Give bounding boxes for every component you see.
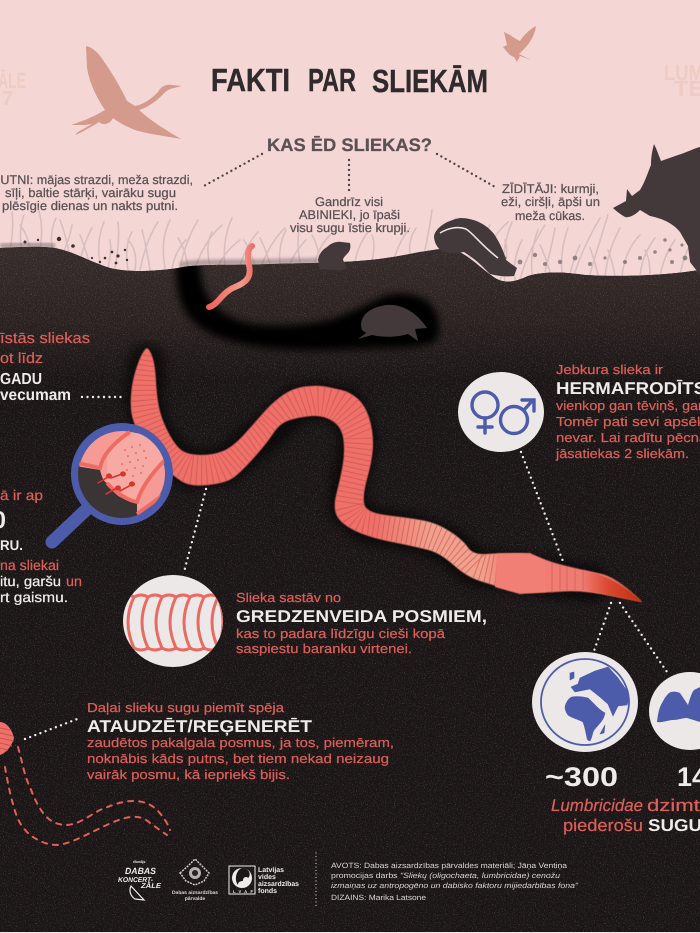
tail segments xyxy=(552,563,583,593)
text block: amphibians: visu sugu īstie krupji. xyxy=(290,221,410,235)
icon: globe xyxy=(532,652,638,752)
numbers: species counts xyxy=(545,762,700,792)
dashed regrowth outline xyxy=(5,747,170,845)
title: SLIEKĀM xyxy=(372,63,488,99)
logo: Dabas aizsardzības pārvalde xyxy=(172,859,218,902)
logo: Dabas aizsardzības pārvalde: Dabas aizsardzības xyxy=(172,890,218,896)
text block: sources: promocijas darbs "Sliekų (oligochaeta, lumbricidae) cenožu xyxy=(331,871,561,880)
numbers: species counts: ~300 xyxy=(545,762,618,792)
text block: mammals: ZĪDĪTĀJI: kurmji, xyxy=(502,182,599,196)
text block: hermaphrodite: Jebkura slieka ir xyxy=(556,362,664,377)
dotted connector: age xyxy=(82,396,126,398)
dotted connectors: species xyxy=(594,603,667,672)
text block: sensing: RU. xyxy=(0,537,23,553)
text block: ring segments: Slieka sastāv no xyxy=(236,590,341,605)
text block: species: SUGU xyxy=(648,816,700,835)
logo: Dabas koncertzāle: DABAS xyxy=(125,866,156,876)
text block: regeneration xyxy=(87,700,394,782)
text block: hermaphrodite: vienkop gan tēviņš, gan xyxy=(556,398,700,413)
text block: ring segments xyxy=(236,590,487,656)
worm shadow xyxy=(144,362,590,583)
text block: regeneration: noknābis kāds putns, bet tiem nekad neizaug xyxy=(87,751,389,766)
text block: age: GADU xyxy=(0,371,42,388)
text block: amphibians xyxy=(290,195,410,235)
dotted connector: hermaphrodite xyxy=(521,452,564,564)
dotted connector: regeneration xyxy=(25,718,80,739)
icon: badger xyxy=(434,218,517,276)
logo: Latvijas vides aizsardzības fonds: LVAF xyxy=(233,889,254,894)
text block: mammals xyxy=(501,182,600,223)
icon: frog xyxy=(318,242,350,270)
text block: sensing: na sliekai xyxy=(0,557,59,573)
text block: hermaphrodite: jāsatiekas 2 sliekām. xyxy=(555,446,689,461)
text block: sensing: itu, garšu xyxy=(0,573,61,589)
icon: Latvia map xyxy=(649,672,700,750)
text block: regeneration: ATAUDZĒT/REĢENERĒT xyxy=(87,717,313,736)
text block: ring segments: saspiestu baranku virtenei. xyxy=(236,641,412,656)
text block: hermaphrodite: HERMAFRODĪTS xyxy=(556,379,700,398)
bottom edge line xyxy=(0,932,700,933)
text block: age: ot līdz xyxy=(0,350,43,367)
text block: regeneration: zaudētos pakaļgala posmus, ja tos, piemēram, xyxy=(87,735,394,750)
icon: gender symbols xyxy=(458,372,544,452)
text block: regeneration: vairāk posmu, kā iepriekš bijis. xyxy=(87,767,290,782)
text block: mammals: meža cūkas. xyxy=(515,209,585,223)
text block: birds: sīļi, baltie stārķi, vairāku sugu xyxy=(5,186,176,200)
logo: Dabas koncertzāle: ZĀLE xyxy=(140,882,161,890)
dotted connector: segments xyxy=(184,489,206,572)
text block: sources: AVOTS: Dabas aizsardzības pārvaldes materiāli; Jāņa Ventiņa xyxy=(331,861,568,870)
magnifying glass xyxy=(52,427,175,542)
worm segments xyxy=(144,355,497,573)
title xyxy=(211,62,488,99)
text block: sensing: un xyxy=(66,573,82,589)
faded logo text left xyxy=(0,68,26,110)
icon: boar xyxy=(613,144,700,275)
text block: age: īstās sliekas xyxy=(0,330,90,347)
text block: age xyxy=(0,330,90,404)
burrow tunnel xyxy=(176,262,439,350)
icon: flying stork xyxy=(71,46,182,139)
heading: who eats earthworms: KAS ĒD SLIEKAS? xyxy=(267,135,432,155)
faded logo text left: 7 xyxy=(2,88,13,110)
text block: sources: DIZAINS: Marika Latsone xyxy=(331,893,426,902)
text block: species: piederošu xyxy=(563,816,643,835)
text block: ring segments: kas to padara līdzīgu cieši kopā xyxy=(236,626,446,641)
logo: Latvijas vides aizsardzības fonds: aizsardzības xyxy=(258,880,299,888)
text block: ring segments: GREDZENVEIDA POSMIEM, xyxy=(236,607,487,626)
logo: Dabas aizsardzības pārvalde: pārvalde xyxy=(185,896,205,902)
logo: Dabas koncertzāle: KONCERT- xyxy=(118,877,154,884)
text block: sources: izmaiņas uz antropogēno un dabisko faktoru mijiedarbības fona" xyxy=(331,881,578,890)
lens xyxy=(75,427,169,521)
logo: Dabas koncertzāle xyxy=(118,860,161,900)
text block: sensing xyxy=(0,487,82,605)
dotted connectors from heading xyxy=(202,154,497,192)
soil crumbs above the ground xyxy=(0,237,318,265)
text block: regeneration: Daļai slieku sugu piemīt spēja xyxy=(87,700,285,715)
text block: age: vecumam xyxy=(0,387,71,404)
worm xyxy=(131,348,642,602)
logo: Latvijas vides aizsardzības fonds xyxy=(229,866,299,895)
text block: amphibians: Gandrīz visi xyxy=(315,195,383,209)
text block: sensing: rt gaismu. xyxy=(0,589,68,605)
logo: Latvijas vides aizsardzības fonds: vides xyxy=(258,873,276,881)
dotted divider xyxy=(315,853,317,906)
grass xyxy=(10,208,692,282)
text block: species: dzimtai xyxy=(647,796,700,815)
text block: hermaphrodite: Tomēr pati sevi apsēklot xyxy=(556,414,700,429)
worm tail xyxy=(583,570,642,602)
logo: Latvijas vides aizsardzības fonds: fonds xyxy=(258,887,277,895)
text block: sources xyxy=(331,861,578,902)
logo: Dabas koncertzāle: rīkotājs xyxy=(133,860,146,864)
faded logo text right xyxy=(664,60,700,101)
worm fragment left xyxy=(0,722,14,755)
text block: species xyxy=(551,796,700,835)
worm clitellum xyxy=(495,553,546,594)
magnified worm xyxy=(78,430,164,518)
icon: hedgehog xyxy=(358,305,427,341)
ground xyxy=(0,240,700,933)
logo: Latvijas vides aizsardzības fonds: Latvijas xyxy=(258,866,284,874)
title: PAR xyxy=(308,62,356,98)
icon: small worm xyxy=(209,246,252,307)
worm body xyxy=(131,348,642,602)
icon: segment rings xyxy=(120,575,226,667)
icon: small flying bird xyxy=(503,26,536,62)
text block: sensing: ā ir ap xyxy=(0,487,43,503)
handle xyxy=(52,508,88,542)
text block: hermaphrodite xyxy=(555,362,700,461)
text block: birds: plēsīgie dienas un nakts putni. xyxy=(2,199,178,213)
text block: birds xyxy=(0,173,193,213)
text block: mammals: eži, ciršļi, āpši un xyxy=(501,195,600,209)
text block: amphibians: ABINIEKI, jo īpaši xyxy=(299,208,400,222)
text block: species: Lumbricidae xyxy=(551,796,643,815)
title: FAKTI xyxy=(211,62,290,98)
